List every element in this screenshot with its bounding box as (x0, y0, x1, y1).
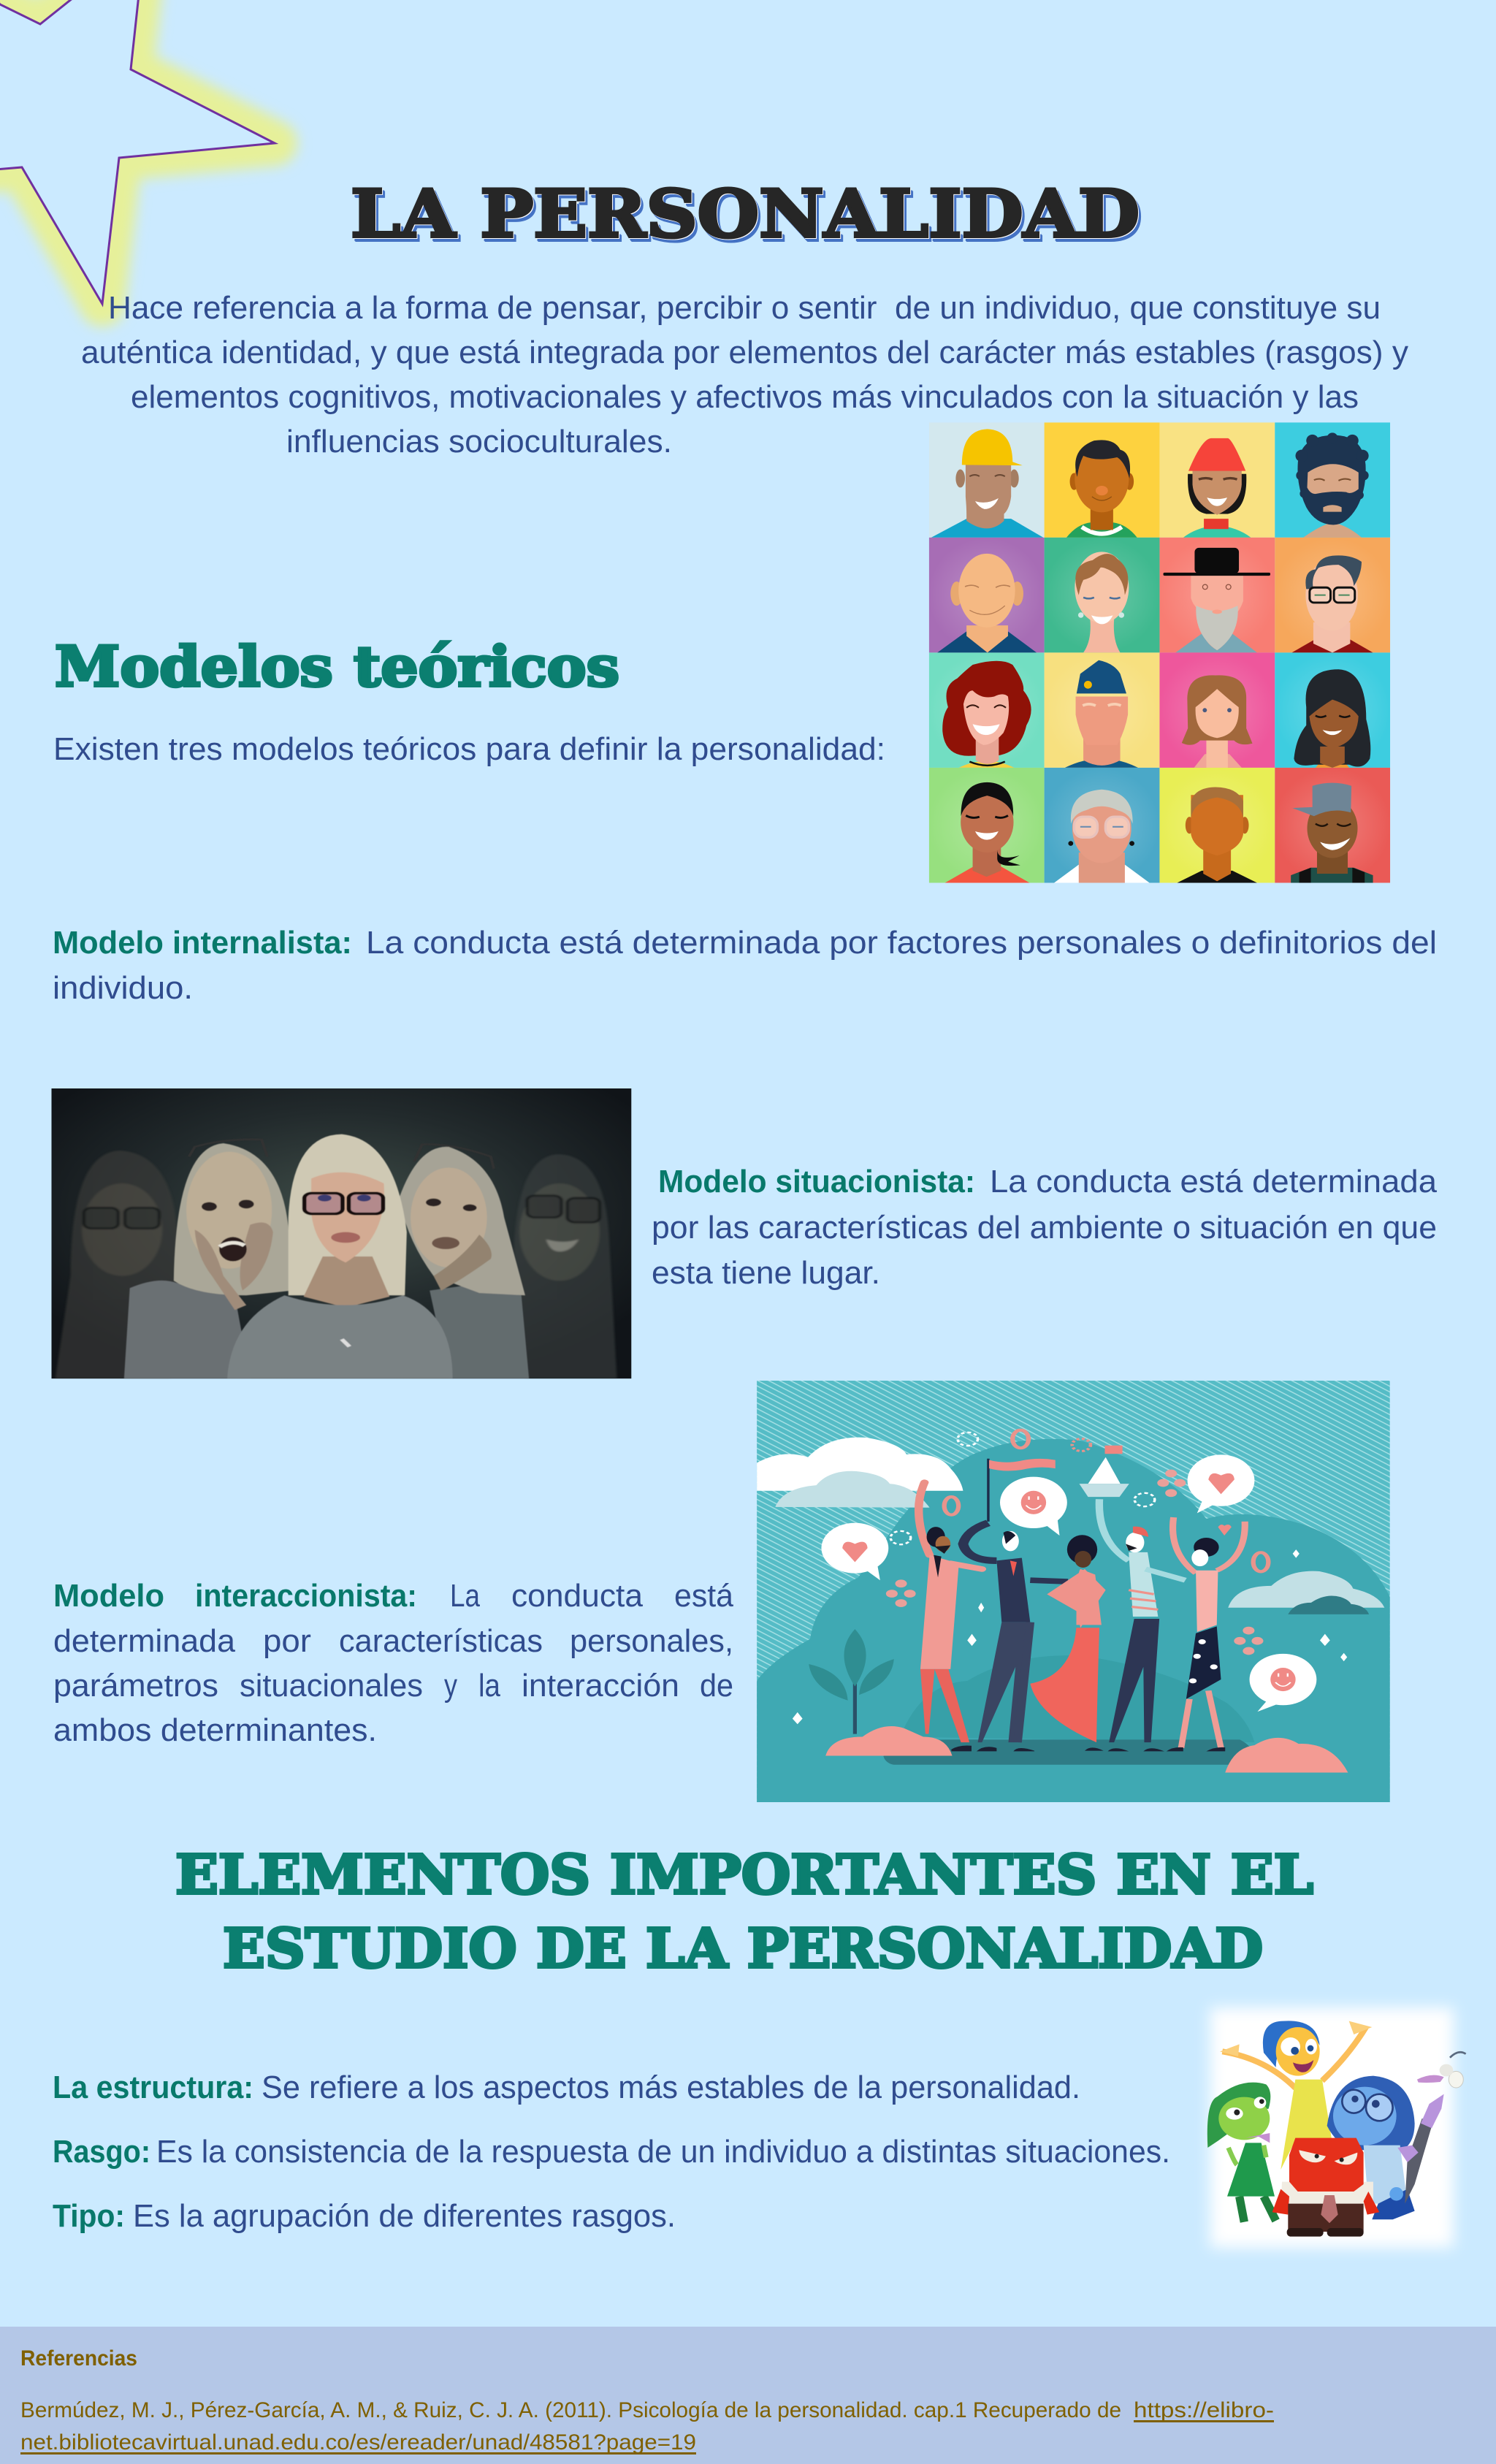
heading: modelos teóricos: Modelos teóricos (55, 634, 619, 699)
face: man on yellow (1159, 768, 1275, 882)
text: modelo interaccionista: determinada (53, 1623, 236, 1659)
text: modelo internalista: La conducta está determinada por factores personales o definitorios del (366, 925, 1437, 961)
hills (757, 1439, 1390, 1802)
title: LA PERSONALIDAD (351, 175, 1140, 253)
text: modelo interaccionista: personales, (570, 1623, 733, 1659)
side figures (124, 1281, 250, 1378)
face: veteran with blue cap (1043, 652, 1160, 768)
character: blue (1327, 2076, 1415, 2219)
text: modelo interaccionista: Modelo (53, 1578, 164, 1614)
image: grid of sixteen faces (928, 422, 1391, 882)
text: modelo interaccionista: parámetros (53, 1668, 218, 1704)
person: dark suit with flag (963, 1523, 996, 1560)
intro paragraph: auténtica identidad, y que está integrada por elementos del carácter más estables (rasgos) y (81, 335, 1408, 370)
face: man with yellow hard hat (929, 422, 1045, 538)
intro paragraph: Hace referencia a la forma de pensar, percibir o sentir de un individuo, que constituye su (108, 290, 1381, 326)
references text: https://elibro- (1134, 2398, 1274, 2422)
decorations (944, 1430, 1268, 1571)
text: modelo situacionista: Modelo situacionista: (658, 1164, 975, 1199)
person: pink suit (919, 1482, 982, 1569)
text: modelo internalista (53, 925, 1437, 1006)
face: man with beard (1275, 422, 1390, 538)
text: modelo interaccionista: está (674, 1578, 734, 1614)
ghost faces (56, 1151, 617, 1378)
person: red dress (1047, 1569, 1106, 1628)
references heading: Referencias (20, 2346, 137, 2370)
text: modelos intro: Existen tres modelos teóricos para definir la personalidad: (53, 731, 885, 767)
center figure (289, 1134, 407, 1295)
photo: woman with several expressions (51, 1088, 631, 1378)
text: modelo interaccionista: ambos determinantes. (53, 1712, 377, 1748)
face: woman with brown hair on pink (1159, 652, 1275, 768)
mounds and plant (825, 1726, 953, 1756)
heading: elementos importantes: ELEMENTOS IMPORTANTES EN EL (175, 1844, 1313, 1907)
text: modelo situacionista: esta tiene lugar. (652, 1255, 880, 1291)
text: modelo interaccionista: situacionales (240, 1668, 423, 1704)
face: woman with red cap (1159, 422, 1275, 538)
text: elementos list: Rasgo: (53, 2134, 150, 2170)
face: woman with long dark hair (1274, 652, 1391, 768)
text: elementos list: Tipo: (53, 2198, 125, 2234)
references text: Bermúdez, M. J., Pérez-García, A. M., & Ruiz, C. J. A. (2011). Psicología de la personalidad. cap.1 Recuperado de (20, 2398, 1121, 2422)
text: modelo interaccionista: por (263, 1623, 311, 1659)
character: red (1272, 2138, 1379, 2237)
text: modelo interaccionista: características (339, 1623, 543, 1659)
text: modelo interaccionista: de (700, 1668, 733, 1704)
text: modelo situacionista: por las características del ambiente o situación en que (652, 1210, 1437, 1246)
face: older woman with glasses (1043, 768, 1160, 882)
star decoration (0, 0, 275, 304)
references text (20, 2398, 1274, 2455)
face: bald man on purple (928, 538, 1045, 652)
text: modelo interaccionista: la (478, 1668, 500, 1704)
text: modelo interaccionista: y (444, 1668, 457, 1704)
intro paragraph: elementos cognitivos, motivacionales y afectivos más vinculados con la situación y las (131, 379, 1359, 415)
face: man with backwards cap (1274, 768, 1391, 882)
text: modelo internalista: Modelo internalista: (53, 925, 352, 961)
character: yellow (1220, 2021, 1372, 2170)
clouds (757, 1438, 963, 1491)
intro paragraph: influencias socioculturales. (286, 424, 672, 459)
face: man with glasses on orange (1274, 538, 1391, 652)
intro paragraph (81, 290, 1408, 459)
person: polka dot skirt (1173, 1517, 1196, 1574)
face: old man with black hat (1159, 538, 1275, 652)
text: elementos list: La estructura: (53, 2070, 253, 2105)
face: boy with green shirt (1045, 422, 1159, 538)
speech bubbles (821, 1454, 1316, 1712)
text: elementos list: Se refiere a los aspectos más estables de la personalidad. (262, 2070, 1080, 2105)
face: woman with curly red hair (928, 652, 1045, 768)
text: elementos list: Es la agrupación de diferentes rasgos. (133, 2198, 676, 2234)
text: modelo situacionista: La conducta está determinada (990, 1164, 1438, 1199)
references text: net.bibliotecavirtual.unad.edu.co/es/ereader/unad/48581?page=19 (20, 2430, 696, 2455)
character: green (1207, 2083, 1276, 2222)
heading: elementos importantes: ESTUDIO DE LA PERSONALIDAD (223, 1918, 1263, 1980)
text: modelo interaccionista: La (450, 1578, 480, 1614)
text: modelo internalista: individuo. (53, 970, 193, 1006)
text: modelo situacionista (652, 1164, 1438, 1291)
illustration: group of people celebrating (757, 1381, 1390, 1802)
text: elementos list: Es la consistencia de la respuesta de un individuo a distintas situaciones. (156, 2134, 1170, 2170)
face: woman with short hair on green (1043, 538, 1160, 652)
text: modelo interaccionista (53, 1578, 734, 1748)
image: animated characters (1207, 2007, 1466, 2248)
character: purple (1397, 2052, 1466, 2204)
boat and flags (1088, 1457, 1121, 1484)
text: elementos list (53, 2070, 1170, 2234)
text: modelo interaccionista: interacción (522, 1668, 679, 1704)
heading: elementos importantes (175, 1844, 1313, 1980)
text: modelo interaccionista: conducta (511, 1578, 644, 1614)
panel: references (0, 2327, 1496, 2464)
face: woman with ponytail on green (928, 768, 1045, 882)
person: striped sweater (1099, 1499, 1129, 1560)
text: modelo interaccionista: interaccionista: (195, 1578, 417, 1614)
